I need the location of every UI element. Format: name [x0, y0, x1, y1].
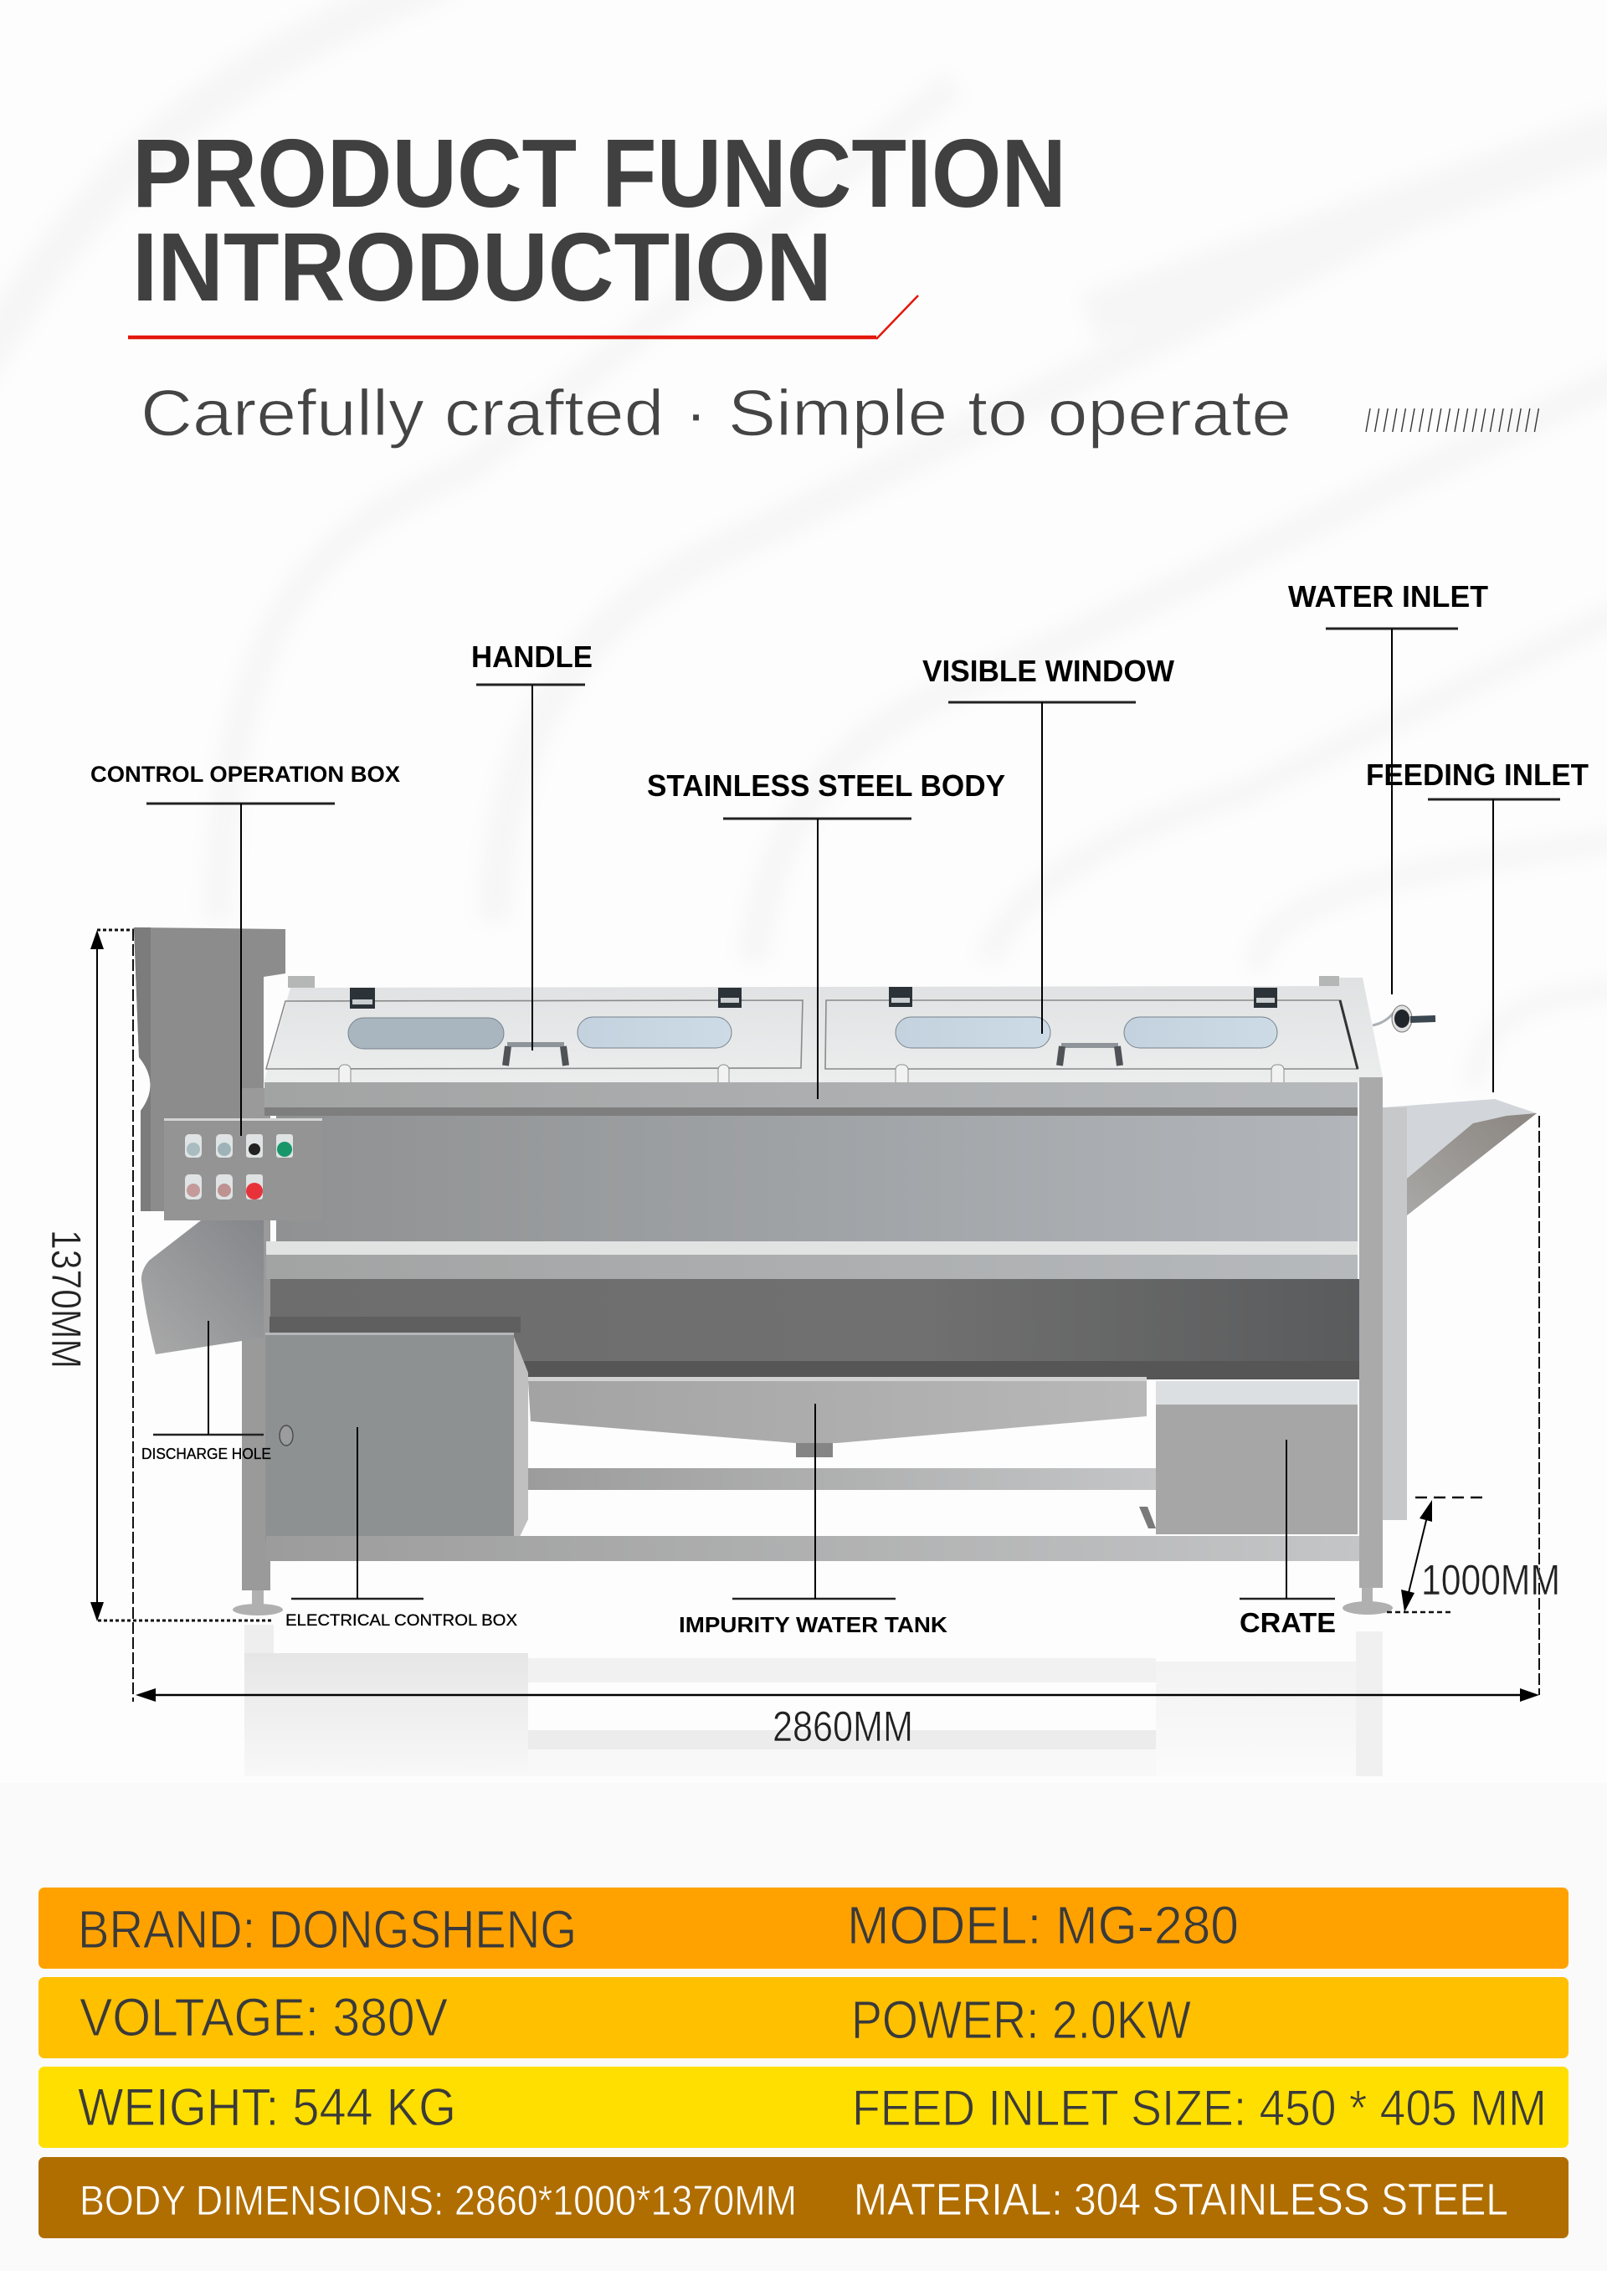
spec row 2: POWER: 2.0KW — [851, 1990, 1192, 2050]
callout: impurity water tank: IMPURITY WATER TANK — [679, 1612, 947, 1637]
spec row 3: FEED INLET SIZE: 450 * 405 MM — [852, 2080, 1547, 2136]
bottom frame bars — [528, 1468, 1156, 1490]
spec row 1 — [39, 1888, 1568, 1969]
floor reflection of machine — [244, 1625, 1383, 1776]
spec row 4: MATERIAL: 304 STAINLESS STEEL — [854, 2175, 1508, 2225]
electrical control box — [265, 1317, 528, 1542]
right lid dark edge — [1340, 1000, 1358, 1069]
discharge chute — [141, 1220, 264, 1354]
body ledge — [266, 1241, 1358, 1255]
lid end posts — [288, 976, 1339, 988]
callout: discharge hole: DISCHARGE HOLE — [141, 1446, 271, 1462]
spec row 4: BODY DIMENSIONS: 2860*1000*1370MM — [80, 2177, 797, 2224]
right leg — [1359, 1077, 1383, 1588]
machine feet — [233, 1588, 1393, 1615]
hatch ornament — [1366, 408, 1538, 432]
control operation box — [164, 1118, 322, 1220]
dimension: depth 1000MM: 1000MM — [1421, 1556, 1560, 1604]
handles — [506, 1042, 1120, 1066]
spec panel — [39, 1888, 1568, 2238]
water valve — [1373, 1005, 1435, 1032]
callout: water inlet: WATER INLET — [1288, 579, 1488, 614]
lid — [264, 978, 1383, 1082]
subtitle: Carefully crafted · Simple to operate — [141, 376, 1291, 449]
dimension: width 2860MM — [133, 929, 1539, 1750]
control tower — [134, 927, 285, 1211]
spec row 1: BRAND: DONGSHENG — [78, 1899, 577, 1960]
dimension: depth 1000MM — [1387, 1497, 1560, 1612]
title: INTRODUCTION — [132, 213, 832, 321]
feed hopper — [1384, 1099, 1537, 1215]
spec row 3: WEIGHT: 544 KG — [78, 2078, 456, 2137]
lid panel outlines — [266, 1000, 1358, 1069]
right side panel — [1383, 1107, 1407, 1520]
dimension: height 1370MM — [43, 930, 274, 1621]
crate — [1139, 1381, 1358, 1534]
dimension: width 2860MM: 2860MM — [773, 1703, 913, 1750]
stainless steel machine — [134, 927, 1537, 1615]
lid latches — [339, 1065, 1284, 1090]
main body panel — [276, 1116, 1358, 1241]
viewing windows — [348, 1017, 1277, 1049]
title: PRODUCT FUNCTION — [132, 119, 1066, 228]
callout: feeding inlet: FEEDING INLET — [1366, 758, 1589, 792]
spec row 1: MODEL: MG-280 — [847, 1895, 1239, 1955]
spec row 2 — [39, 1977, 1568, 2058]
callout: crate: CRATE — [1240, 1607, 1336, 1638]
callout: control operation box: CONTROL OPERATION BOX — [90, 762, 400, 787]
callout: handle: HANDLE — [471, 639, 593, 674]
callout: stainless steel body: STAINLESS STEEL BODY — [647, 768, 1005, 803]
black hinges — [350, 987, 1277, 1009]
spec row 3 — [39, 2067, 1568, 2148]
lower interior — [266, 1279, 1359, 1361]
upper band — [264, 1082, 1358, 1107]
spec row 2: VOLTAGE: 380V — [80, 1987, 448, 2047]
impurity water tank — [528, 1377, 1147, 1457]
title underline accent — [128, 295, 918, 339]
title — [132, 119, 1066, 321]
callout: electrical control box: ELECTRICAL CONTROL BOX — [285, 1612, 517, 1630]
dimension: height 1370MM: 1370MM — [43, 1230, 90, 1369]
callout: visible window: VISIBLE WINDOW — [922, 654, 1174, 688]
left leg — [242, 1088, 270, 1590]
spec row 4 — [39, 2157, 1568, 2238]
